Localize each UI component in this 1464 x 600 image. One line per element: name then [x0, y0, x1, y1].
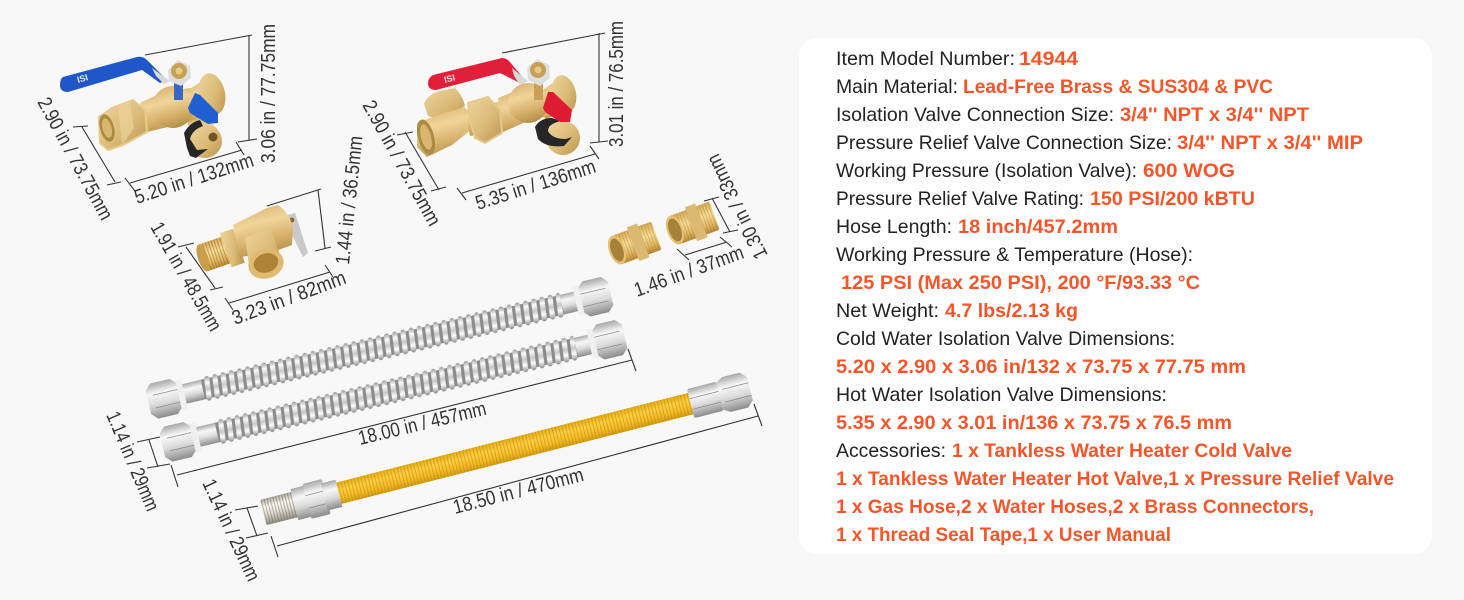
spec: item model number: Item Model Number: — [836, 48, 1015, 70]
icon: hot valve red handle: ISI — [443, 72, 456, 85]
spec: hose length: Hose Length: — [836, 216, 952, 238]
spec: net weight: 4.7 lbs/2.13 kg — [945, 300, 1078, 322]
spec: pressure relief valve rating — [836, 188, 1255, 210]
label: gas hose length: 18.50 in / 470mm — [451, 464, 586, 519]
spec: item model number: 14944 — [1019, 48, 1078, 70]
spec: net weight: Net Weight: — [836, 300, 939, 322]
cold water isolation valve with dimensions — [33, 24, 280, 224]
label: width: 3.23 in / 82mm — [229, 267, 349, 330]
spec: accessories: 1 x Tankless Water Heater Hot Valve,1 x Pressure Relief Valve — [836, 468, 1394, 490]
label: connector width: 1.46 in / 37mm — [631, 242, 747, 302]
spec: net weight — [836, 300, 1078, 322]
spec: working pressure isolation valve: Working Pressure (Isolation Valve): — [836, 160, 1137, 182]
brass connectors with dimensions — [603, 150, 772, 302]
spec: isolation valve connection size: 3/4'' NPT x 3/4'' NPT — [1120, 104, 1309, 126]
dimension lines: connectors — [677, 197, 738, 260]
gas hose dimensions — [197, 404, 762, 585]
dimension lines: hot valve — [397, 33, 608, 200]
spec: pressure relief valve rating: Pressure Relief Valve Rating: — [836, 188, 1084, 210]
panel background — [799, 38, 1432, 554]
hot water isolation valve with dimensions — [358, 21, 628, 230]
spec: pressure relief valve connection size — [836, 132, 1363, 154]
spec: accessories: 1 x Tankless Water Heater Cold Valve — [952, 440, 1292, 462]
spec: cold water valve dimensions — [836, 328, 1246, 378]
spec: main material: Lead-Free Brass & SUS304 & PVC — [963, 76, 1273, 98]
icon: right brass connector — [661, 199, 721, 250]
label: height: 3.06 in / 77.75mm — [258, 24, 280, 163]
spec: pressure relief valve connection size: Pressure Relief Valve Connection Size: — [836, 132, 1172, 154]
spec: accessories — [836, 440, 1394, 546]
dimension lines: cold valve — [73, 35, 257, 191]
spec: working pressure and temperature hose: 125 PSI (Max 250 PSI), 200 °F/93.33 °C — [841, 272, 1200, 294]
label: depth: 1.91 in / 48.5mm — [146, 218, 226, 335]
spec: hot water valve dimensions: Hot Water Isolation Valve Dimensions: — [836, 384, 1167, 406]
panel: specifications — [799, 38, 1432, 554]
spec: working pressure isolation valve: 600 WOG — [1143, 160, 1235, 182]
spec: working pressure and temperature hose — [836, 244, 1200, 294]
icon: pressure relief valve — [192, 205, 308, 283]
label: depth: 2.90 in / 73.75mm — [358, 97, 445, 230]
pressure relief valve with dimensions — [146, 135, 367, 335]
spec: pressure relief valve connection size: 3/4'' NPT x 3/4'' MIP — [1177, 132, 1363, 154]
icon: cold valve blue handle: ISI — [76, 72, 89, 85]
label: height: 3.01 in / 76.5mm — [606, 21, 628, 147]
icon: hot valve brass body — [414, 73, 580, 157]
dimension lines: water hoses — [137, 349, 636, 487]
label: water hose length: 18.00 in / 457mm — [356, 398, 489, 450]
spec: cold water valve dimensions: 5.20 x 2.90 x 3.06 in/132 x 73.75 x 77.75 mm — [836, 356, 1246, 378]
spec: isolation valve connection size — [836, 104, 1309, 126]
label: width: 5.20 in / 132mm — [132, 150, 256, 209]
spec: main material: Main Material: — [836, 76, 958, 98]
spec: hot water valve dimensions — [836, 384, 1232, 434]
icon: hot valve red handle — [428, 58, 572, 122]
spec: hose length — [836, 216, 1118, 238]
icon: cold valve blue handle — [60, 57, 218, 124]
spec: working pressure and temperature hose: Working Pressure & Temperature (Hose): — [836, 244, 1193, 266]
spec: hose length: 18 inch/457.2mm — [958, 216, 1118, 238]
spec: accessories: 1 x Gas Hose,2 x Water Hoses,2 x Brass Connectors, — [836, 496, 1314, 518]
spec: pressure relief valve rating: 150 PSI/200 kBTU — [1090, 188, 1255, 210]
label: depth: 2.90 in / 73.75mm — [33, 94, 117, 224]
icon: cold valve brass body — [97, 71, 229, 158]
spec: hot water valve dimensions: 5.35 x 2.90 x 3.01 in/136 x 73.75 x 76.5 mm — [836, 412, 1232, 434]
silver water hose 2 — [158, 319, 629, 463]
icon: left brass connector — [603, 219, 663, 270]
spec: accessories: 1 x Thread Seal Tape,1 x User Manual — [836, 524, 1171, 546]
dimension lines: relief valve — [178, 189, 333, 310]
yellow gas hose — [259, 371, 754, 530]
label: connector height: 1.30 in / 33mm — [703, 150, 772, 262]
spec: cold water valve dimensions: Cold Water Isolation Valve Dimensions: — [836, 328, 1175, 350]
silver water hose 1 — [144, 276, 615, 420]
dimension lines: gas hose — [235, 404, 762, 557]
label: width: 5.35 in / 136mm — [473, 156, 599, 215]
spec: accessories: Accessories: — [836, 440, 946, 462]
water hose dimensions — [101, 349, 636, 515]
spec: isolation valve connection size: Isolation Valve Connection Size: — [836, 104, 1114, 126]
label: height: 1.44 in / 36.5mm — [332, 135, 367, 266]
label: water hose nut size: 1.14 in / 29mm — [101, 408, 163, 515]
